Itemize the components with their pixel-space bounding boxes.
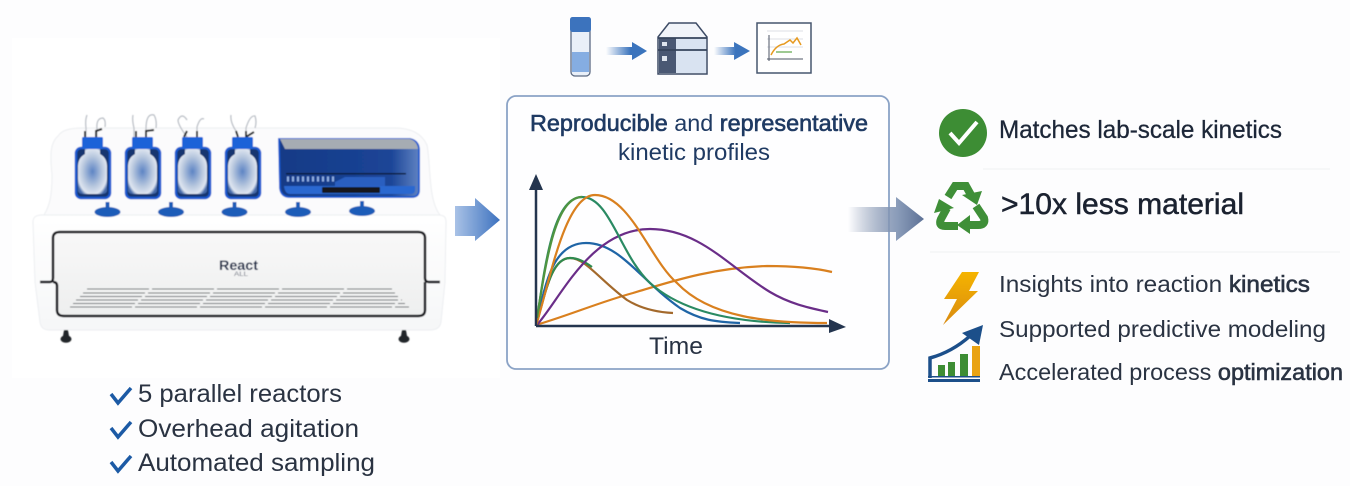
curve: small green brown — [536, 258, 673, 326]
curve: small green rising — [538, 258, 592, 318]
curve: teal green — [536, 197, 790, 326]
instrument logo — [219, 258, 259, 278]
curve: flat orange — [536, 266, 832, 325]
feature list: instrument capabilities — [111, 380, 375, 477]
outcome: less material — [934, 186, 1244, 234]
instrument upper housing — [44, 128, 440, 215]
outcome: insights into reaction kinetics — [943, 271, 1310, 325]
line chart: kinetic curves — [536, 195, 832, 326]
chart axes — [529, 174, 846, 333]
axis label: time: Time — [649, 333, 703, 360]
outcome: less material: >10x less material — [1001, 188, 1244, 221]
panel heading: kinetic profiles — [618, 139, 770, 165]
reactor 2 — [126, 115, 160, 198]
instrument: ReactALL reactor system — [33, 115, 446, 343]
feet — [60, 330, 410, 343]
panel heading — [530, 110, 868, 165]
icon: sample vial — [570, 17, 591, 76]
icon: data chart — [757, 23, 811, 73]
front panel with black outline — [40, 232, 440, 316]
icon: lightning bolt — [943, 272, 979, 325]
curve: orange — [536, 195, 827, 326]
outcome: matches lab-scale kinetics: Matches lab-scale kinetics — [999, 116, 1282, 144]
icon: growth chart — [928, 325, 983, 382]
arrow: profiles to outcomes — [848, 197, 924, 241]
reactor 1 — [76, 115, 110, 198]
panel: kinetic profiles — [507, 96, 889, 369]
icon: green check — [939, 109, 987, 157]
arrow: analyser to data — [714, 42, 750, 60]
curve: green rising edge — [537, 197, 582, 318]
instrument logo: React — [219, 258, 259, 273]
feature: overhead agitation: Overhead agitation — [138, 415, 359, 443]
icon: recycle — [934, 186, 984, 234]
feature: automated sampling: Automated sampling — [138, 449, 375, 477]
stirrer knobs — [94, 201, 375, 217]
reactor 4 — [226, 115, 260, 198]
instrument logo: ALL — [234, 272, 249, 278]
panel heading: Reproducible and representative — [530, 110, 868, 136]
arrow: vial to analyser — [606, 42, 647, 60]
icon: analyser instrument — [658, 23, 707, 74]
outcome: supported predictive modeling: Supported predictive modeling — [999, 316, 1326, 342]
outcome: accelerated process optimization: Accelerated process optimization — [999, 359, 1343, 385]
curve: purple — [536, 229, 828, 326]
outcome: matches lab-scale kinetics — [939, 109, 1282, 157]
curve: blue — [536, 243, 740, 326]
panel: instrument backdrop — [12, 38, 500, 378]
feature: parallel reactors: 5 parallel reactors — [138, 380, 342, 408]
reactor 3 — [176, 116, 210, 198]
outcome: insights into reaction kinetics: Insights into reaction kinetics — [999, 271, 1310, 297]
outcome: accelerated process optimization — [928, 325, 1343, 385]
sample enclosure — [279, 139, 419, 197]
slatted vent — [70, 289, 409, 307]
instrument lower body — [33, 215, 446, 330]
arrow: instrument to profiles — [455, 198, 500, 241]
